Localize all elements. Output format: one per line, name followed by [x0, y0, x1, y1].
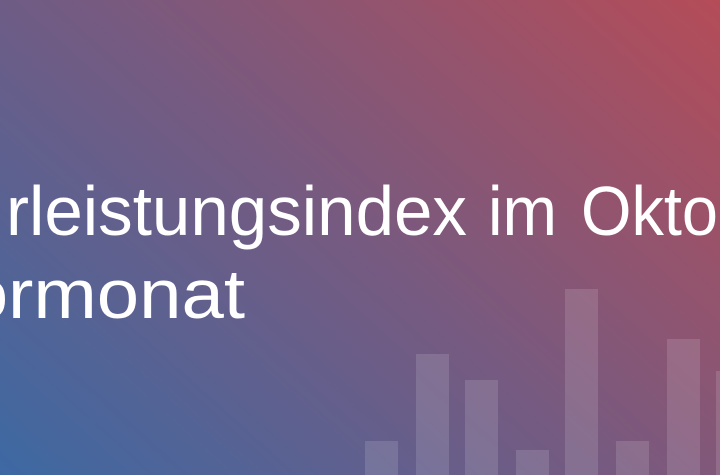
title: rmonat — [8, 255, 245, 333]
title: im — [488, 172, 557, 250]
title: rleistungsindex — [6, 172, 467, 250]
bar chart decoration — [365, 289, 720, 475]
title — [0, 172, 720, 333]
